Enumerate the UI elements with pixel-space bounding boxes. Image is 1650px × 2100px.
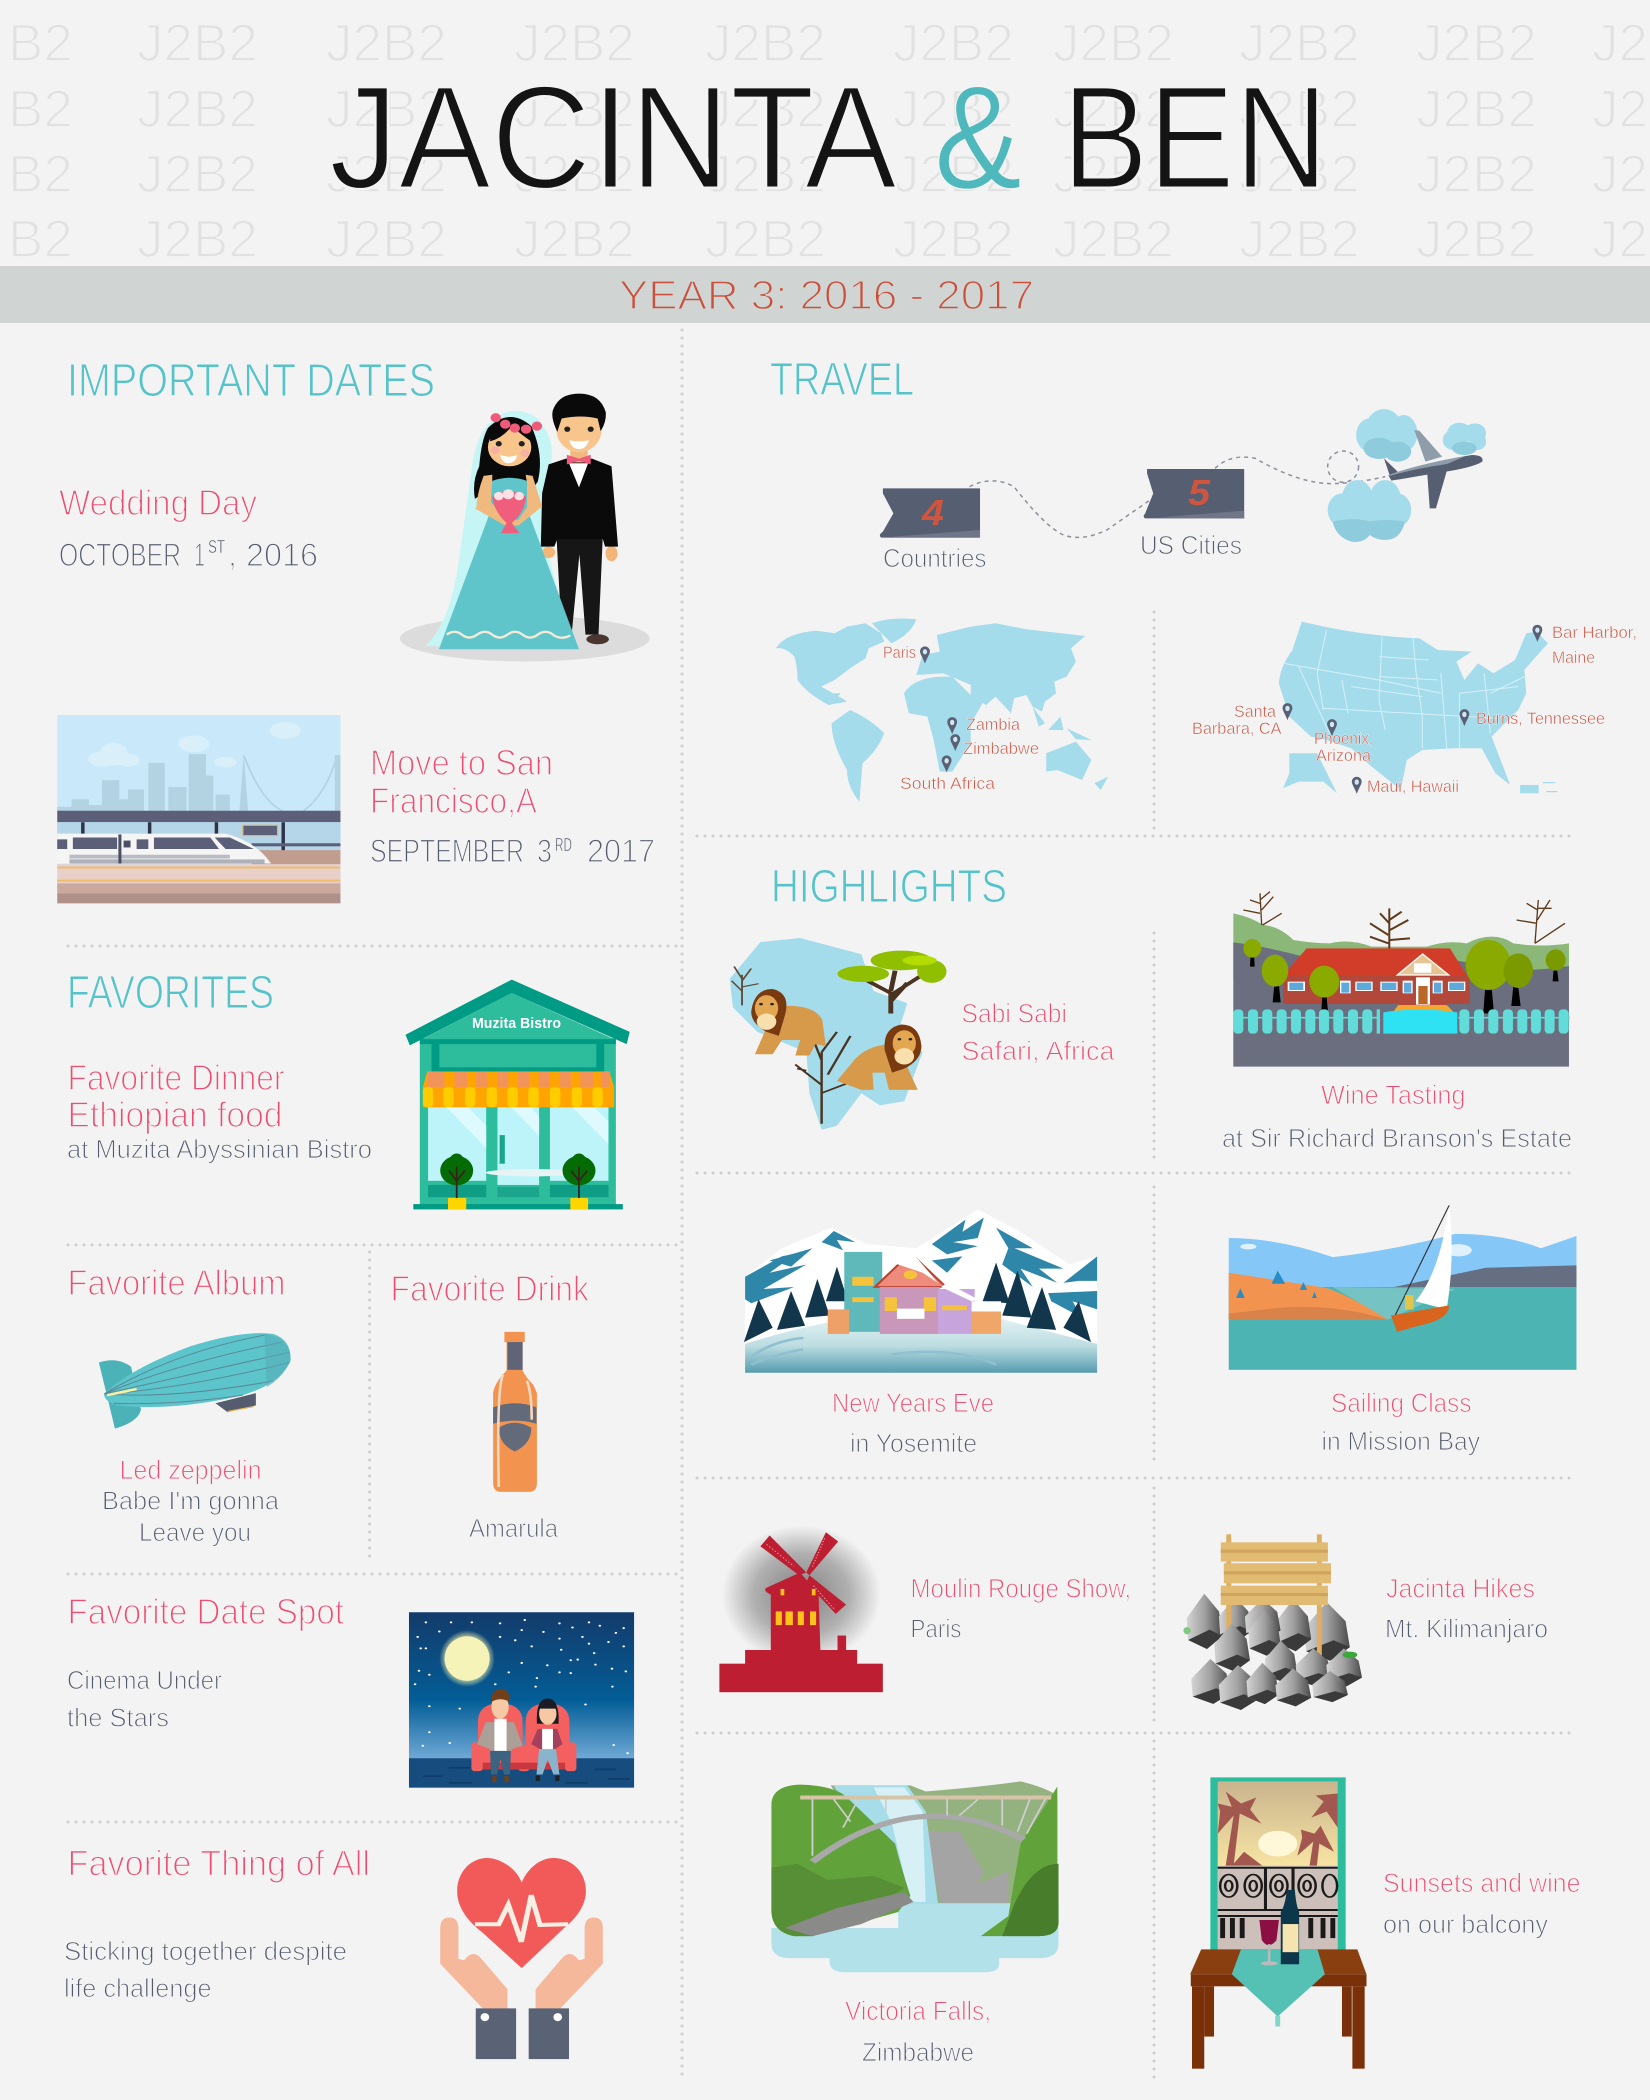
favorite dinner text: Ethiopian food — [68, 1094, 282, 1135]
move to san francisco text: RD — [555, 835, 572, 855]
US map — [1279, 622, 1557, 794]
move to san francisco text: Francisco,A — [370, 780, 537, 821]
US map labels: Bar Harbor, — [1552, 623, 1637, 642]
heading: highlights: HIGHLIGHTS — [771, 860, 1007, 912]
wine tasting text — [1222, 1080, 1572, 1153]
watermark pattern: J2B2 — [1239, 210, 1360, 269]
watermark pattern: B2 — [8, 210, 73, 269]
sailing class text: Sailing Class — [1331, 1388, 1472, 1418]
sunsets and wine text: Sunsets and wine — [1383, 1868, 1580, 1898]
year banner — [0, 266, 1650, 323]
watermark pattern: J2B2 — [893, 145, 1014, 204]
illustration: bottle — [493, 1332, 537, 1492]
led zeppelin text: Babe I'm gonna — [102, 1486, 280, 1516]
watermark pattern: J2 — [1592, 14, 1648, 73]
title: BEN — [1062, 56, 1328, 220]
move to san francisco text: 2017 — [587, 833, 655, 869]
panel: travel — [770, 353, 1637, 802]
watermark pattern: B2 — [8, 80, 73, 139]
US map labels: Burns, Tennessee — [1476, 709, 1605, 728]
watermark pattern: B2 — [8, 145, 73, 204]
watermark pattern — [8, 14, 1648, 269]
icon: plane — [1384, 430, 1483, 508]
watermark pattern: J2B2 — [1416, 14, 1537, 73]
heading: favorites: FAVORITES — [67, 966, 274, 1018]
wedding day text: , 2016 — [228, 537, 318, 573]
wedding day text: ST — [208, 537, 225, 557]
panel: highlights — [719, 860, 1580, 2069]
watermark pattern: J2 — [1592, 145, 1648, 204]
amarula label: Amarula — [469, 1513, 558, 1543]
couple in seats — [477, 1689, 563, 1782]
favorite date spot text: Cinema Under — [67, 1665, 222, 1695]
watermark pattern: J2B2 — [137, 210, 258, 269]
map pins — [920, 646, 960, 772]
watermark pattern: J2 — [1592, 80, 1648, 139]
sunsets and wine text: on our balcony — [1383, 1909, 1548, 1939]
favorite thing of all text: life challenge — [64, 1973, 212, 2003]
illustration: sunset balcony with wine — [1190, 1777, 1366, 2069]
move to san francisco text: 3 — [537, 833, 552, 869]
US map labels: Barbara, CA — [1192, 719, 1282, 738]
watermark pattern: J2B2 — [514, 14, 635, 73]
watermark pattern: J2B2 — [893, 80, 1014, 139]
illustration: zeppelin — [99, 1333, 291, 1429]
watermark pattern: J2B2 — [705, 14, 826, 73]
flight path, flags, clouds and plane — [880, 409, 1486, 542]
watermark pattern: J2B2 — [137, 145, 258, 204]
illustration: hands holding heart — [440, 1858, 603, 2059]
watermark pattern: J2 — [1592, 210, 1648, 269]
bare tree — [795, 1030, 864, 1124]
flag numbers and labels — [883, 472, 1242, 573]
move to san francisco text: SEPTEMBER — [370, 833, 524, 869]
safari text: Sabi Sabi — [962, 998, 1067, 1028]
US map labels: Phoenix, — [1314, 729, 1373, 748]
favorite dinner text: at Muzita Abyssinian Bistro — [67, 1134, 372, 1164]
world map labels: Paris — [883, 643, 916, 662]
year banner: YEAR 3: 2016 - 2017 — [619, 272, 1034, 318]
groom — [541, 394, 618, 644]
US map labels — [1192, 623, 1637, 796]
US map labels: Maine — [1552, 648, 1595, 667]
illustration: rocks and wooden sign — [1183, 1534, 1362, 1710]
watermark pattern: J2B2 — [326, 145, 447, 204]
moulin rouge text — [910, 1574, 1131, 1644]
illustration: train and San Francisco skyline — [57, 715, 340, 903]
watermark pattern: J2B2 — [1053, 145, 1174, 204]
watermark pattern: J2B2 — [326, 210, 447, 269]
title — [329, 56, 1328, 220]
watermark pattern: J2B2 — [705, 80, 826, 139]
watermark pattern: J2B2 — [137, 14, 258, 73]
wine tasting text: Wine Tasting — [1321, 1080, 1466, 1110]
move to san francisco text — [370, 742, 655, 869]
watermark pattern: J2B2 — [1239, 14, 1360, 73]
wedding day text: Wedding Day — [59, 482, 257, 523]
watermark pattern: J2B2 — [705, 210, 826, 269]
safari text — [962, 998, 1115, 1066]
wine tasting text: at Sir Richard Branson's Estate — [1222, 1123, 1572, 1153]
title: & — [934, 56, 1022, 220]
victoria falls text: Victoria Falls, — [845, 1996, 991, 2026]
led zeppelin text — [102, 1455, 280, 1547]
watermark pattern: J2B2 — [705, 145, 826, 204]
victoria falls text — [845, 1996, 991, 2067]
watermark pattern: J2B2 — [326, 14, 447, 73]
move to san francisco text: Move to San — [370, 742, 553, 783]
flag numbers and labels: 5 — [1188, 472, 1211, 513]
led zeppelin text: Led zeppelin — [120, 1455, 262, 1485]
favorite date spot text: Favorite Date Spot — [68, 1591, 344, 1632]
watermark pattern: J2B2 — [893, 14, 1014, 73]
world map labels: Zimbabwe — [963, 739, 1039, 758]
watermark pattern: J2B2 — [514, 145, 635, 204]
watermark pattern: J2B2 — [1239, 80, 1360, 139]
flag numbers and labels: US Cities — [1140, 530, 1242, 560]
watermark pattern: J2B2 — [514, 210, 635, 269]
watermark pattern: J2B2 — [1239, 145, 1360, 204]
jacinta hikes text: Jacinta Hikes — [1386, 1574, 1535, 1604]
US map labels: Maui, Hawaii — [1367, 777, 1459, 796]
flag numbers and labels: Countries — [883, 543, 986, 573]
illustration: cinema under the stars — [409, 1612, 634, 1788]
favorite thing of all text: Favorite Thing of All — [68, 1842, 370, 1884]
title: JACINTA — [329, 56, 897, 220]
heading: travel: TRAVEL — [770, 353, 914, 405]
illustration: Moulin Rouge — [719, 1525, 883, 1692]
panel: important dates — [57, 354, 655, 903]
flag numbers and labels: 4 — [921, 492, 944, 533]
jacinta hikes text — [1385, 1574, 1548, 1644]
lion left — [751, 989, 826, 1056]
victoria falls text: Zimbabwe — [862, 2037, 974, 2067]
wedding day text: 1 — [194, 537, 205, 573]
watermark pattern: J2B2 — [326, 80, 447, 139]
favorite date spot text: the Stars — [67, 1702, 169, 1732]
world map labels: South Africa — [900, 774, 996, 793]
illustration: Muzita Bistro storefront: Muzita Bistro — [472, 1016, 561, 1032]
world map — [776, 619, 1108, 802]
sailing class text: in Mission Bay — [1322, 1426, 1480, 1456]
favorite album text: Favorite Album — [68, 1262, 286, 1303]
favorite date spot text — [67, 1591, 344, 1732]
world map labels: Zambia — [966, 715, 1021, 734]
lion right — [837, 1025, 921, 1090]
sunsets and wine text — [1383, 1868, 1580, 1939]
favorite dinner text: Favorite Dinner — [68, 1057, 285, 1098]
favorite drink text: Favorite Drink — [390, 1268, 590, 1309]
jacinta hikes text: Mt. Kilimanjaro — [1385, 1614, 1548, 1644]
watermark pattern: J2B2 — [1053, 14, 1174, 73]
watermark pattern: J2B2 — [1416, 210, 1537, 269]
wedding day text — [59, 482, 318, 573]
watermark pattern: J2B2 — [1053, 210, 1174, 269]
US map labels: Santa — [1234, 702, 1277, 721]
panel: favorites — [64, 966, 634, 2059]
safari text: Safari, Africa — [962, 1036, 1115, 1066]
watermark pattern: B2 — [8, 14, 73, 73]
watermark pattern: J2B2 — [893, 210, 1014, 269]
world map labels — [883, 643, 1039, 793]
watermark pattern: J2B2 — [514, 80, 635, 139]
watermark pattern: J2B2 — [137, 80, 258, 139]
US map labels: Arizona — [1316, 746, 1372, 765]
illustration: wine estate — [1233, 892, 1570, 1067]
favorite thing of all text — [64, 1842, 370, 2003]
illustration: sailing in Mission Bay — [1229, 1205, 1576, 1370]
illustration: Muzita Bistro storefront — [406, 980, 630, 1209]
wedding day text: OCTOBER — [59, 537, 181, 573]
flag: 5 US cities — [1144, 469, 1244, 518]
watermark pattern: J2B2 — [1416, 80, 1537, 139]
new years eve text: New Years Eve — [832, 1388, 994, 1418]
new years eve text — [832, 1388, 994, 1458]
new years eve text: in Yosemite — [850, 1428, 977, 1458]
moulin rouge text: Paris — [910, 1614, 962, 1644]
watermark pattern: J2B2 — [1416, 145, 1537, 204]
heading: important dates: IMPORTANT DATES — [67, 354, 435, 406]
illustration: Africa safari with lions — [730, 938, 947, 1130]
illustration: Yosemite snow village — [744, 1209, 1097, 1373]
led zeppelin text: Leave you — [139, 1517, 251, 1547]
illustration: Victoria Falls — [771, 1781, 1059, 1972]
map pins — [1283, 625, 1542, 794]
watermark pattern: J2B2 — [1053, 80, 1174, 139]
illustration: bride and groom — [400, 394, 650, 661]
flag: 4 countries — [880, 488, 980, 538]
moulin rouge text: Moulin Rouge Show, — [910, 1574, 1131, 1604]
favorite dinner text — [67, 1057, 372, 1164]
icon: clouds — [1328, 409, 1486, 542]
favorite thing of all text: Sticking together despite — [64, 1936, 347, 1966]
sailing class text — [1322, 1388, 1480, 1456]
